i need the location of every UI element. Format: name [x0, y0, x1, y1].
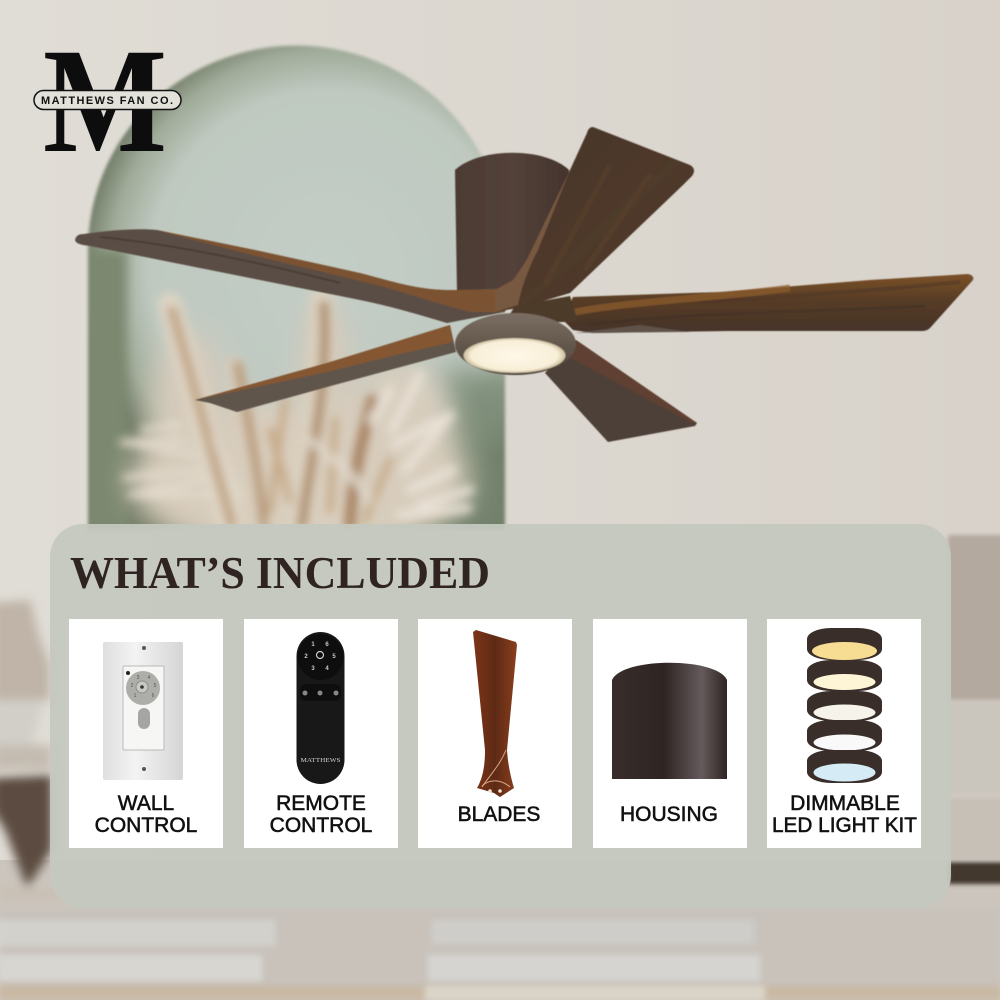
card: housing — [593, 619, 747, 848]
icon: blade — [473, 630, 517, 797]
label: DIMMABLE — [790, 792, 900, 815]
card: wall control — [69, 619, 223, 848]
icon: wall control: 1 — [134, 693, 137, 699]
icon: remote: 5 — [332, 654, 336, 660]
background: green arch niche with pampas grass — [86, 44, 508, 524]
icon: wall control: 4 — [148, 675, 151, 681]
icon: wall control: 5 — [154, 683, 157, 689]
card: wall control: CONTROL — [95, 814, 197, 837]
blade: right — [563, 274, 973, 333]
panel: what's included — [50, 524, 951, 908]
background: left pillows and plant — [0, 600, 117, 980]
card: dimmable LED light kit: LED LIGHT KIT — [772, 814, 917, 837]
card: dimmable LED light kit — [767, 619, 921, 848]
label: REMOTE — [276, 792, 366, 815]
label: HOUSING — [620, 803, 718, 826]
background: right sofa — [948, 535, 1000, 884]
icon: remote: 3 — [311, 666, 315, 672]
icon: remote: 1 — [311, 642, 315, 648]
background: floor with light bands — [0, 908, 1000, 1000]
fan housing — [455, 153, 569, 292]
blade: left — [75, 229, 510, 323]
logo: Matthews Fan Co.: M — [43, 18, 167, 184]
icon: remote: 4 — [325, 666, 329, 672]
card: remote control: CONTROL — [270, 814, 372, 837]
motor hub — [505, 296, 578, 322]
icon: remote: 6 — [325, 642, 329, 648]
pampas plumes — [114, 316, 487, 524]
heading: WHAT’S INCLUDED — [70, 547, 490, 598]
label: WALL — [118, 792, 174, 815]
icon: LED light stack — [807, 628, 882, 783]
LED glow — [464, 338, 566, 373]
icon: remote — [296, 632, 344, 784]
icon: remote: MATTHEWS — [300, 757, 341, 764]
LED light ring — [455, 313, 576, 375]
card: remote control — [244, 619, 398, 848]
icon: wall control: 3 — [137, 675, 140, 681]
icon: housing — [612, 663, 727, 779]
blade: lower left — [195, 325, 456, 412]
card: blades — [418, 619, 572, 848]
icon: remote: 2 — [304, 654, 308, 660]
blade: lower right — [545, 340, 697, 442]
icon: wall control: 6 — [152, 693, 155, 699]
label: BLADES — [458, 803, 540, 826]
icon: wall control — [103, 642, 183, 780]
blade: top — [495, 127, 694, 312]
logo: Matthews Fan Co.: MATTHEWS FAN CO. — [41, 95, 173, 107]
ceiling fan — [75, 127, 973, 442]
icon: wall control: 2 — [131, 683, 134, 689]
